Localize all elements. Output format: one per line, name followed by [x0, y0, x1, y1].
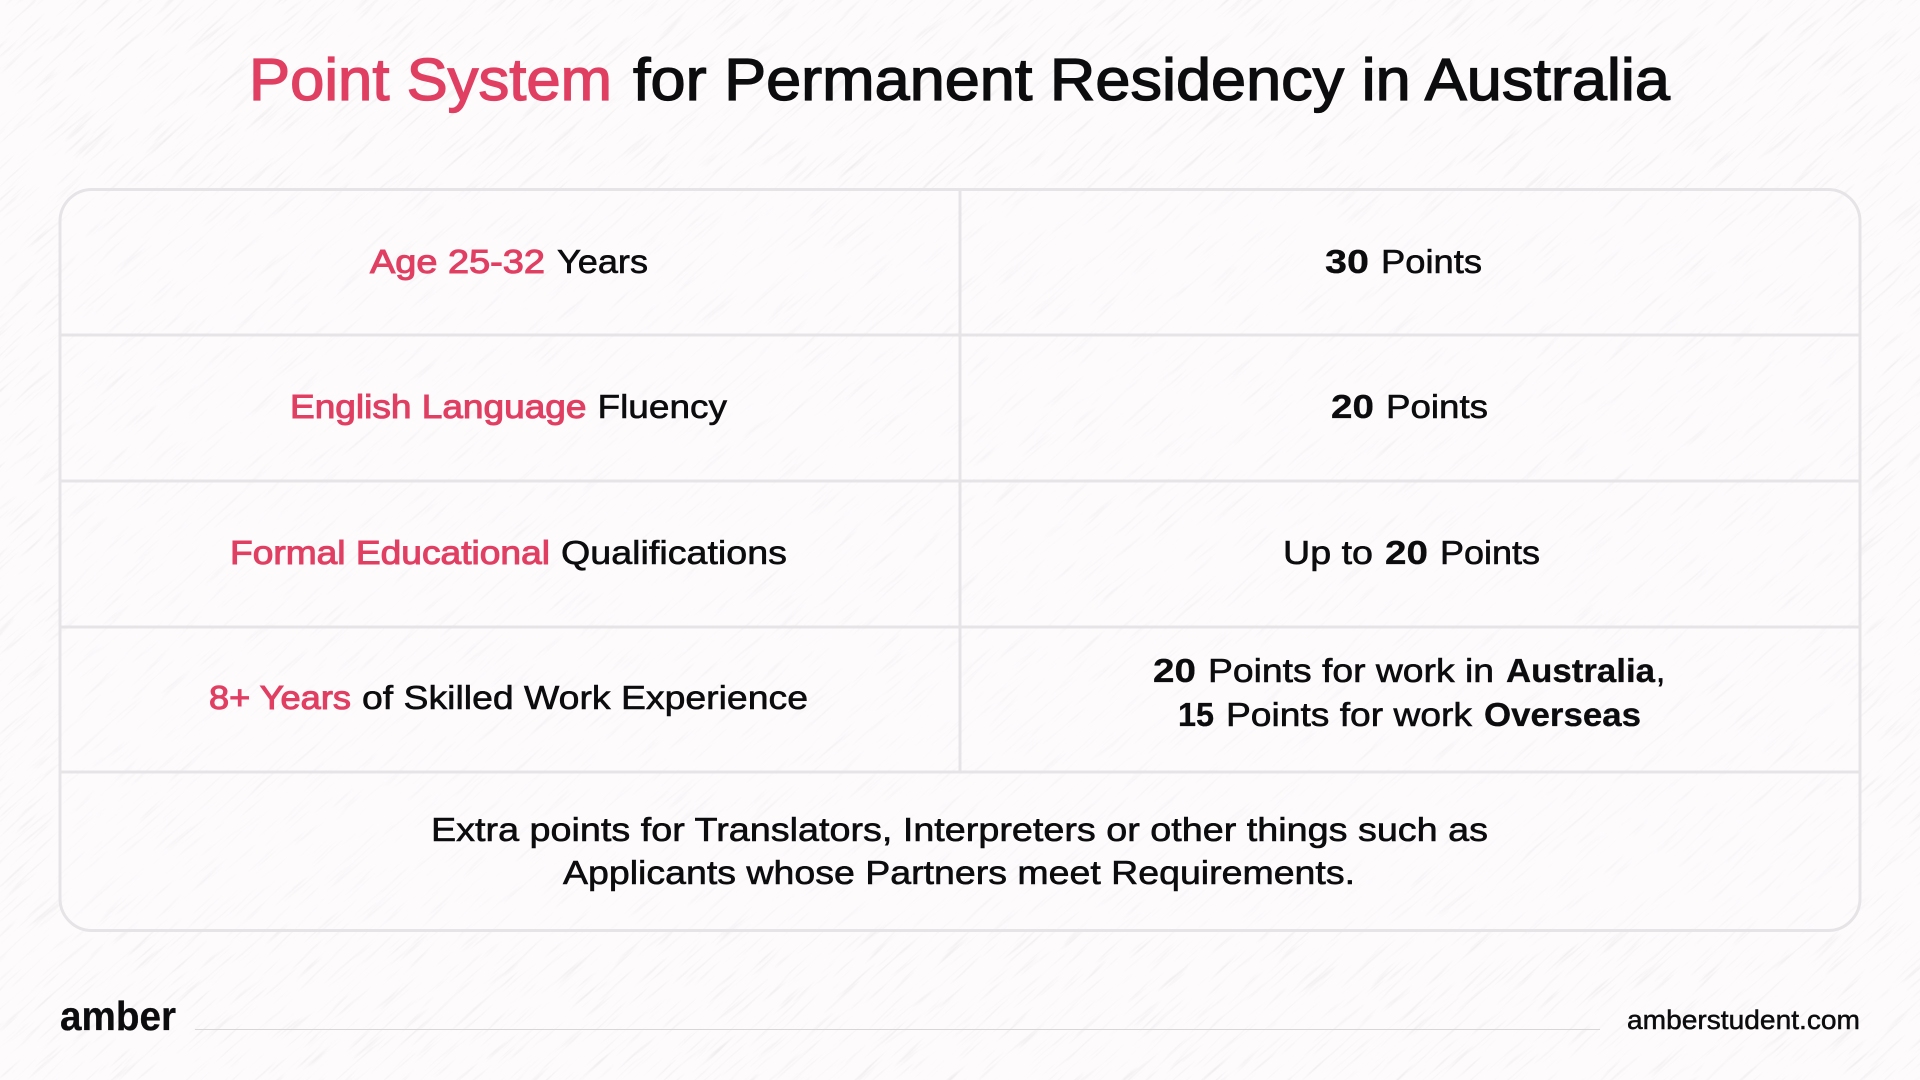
footer rule [195, 1029, 1600, 1030]
row: english language: Fluency [598, 388, 728, 425]
row: age: Points [1381, 243, 1482, 280]
row: english language: Points [1386, 388, 1488, 425]
row: education: Points [1440, 534, 1540, 571]
note: extra points: Applicants whose Partners meet Requirements. [563, 854, 1355, 891]
row: english language: English Language [290, 388, 586, 425]
row: age: Age 25-32 [370, 243, 545, 280]
title: Point System [249, 47, 612, 113]
row: education: Formal Educational [230, 534, 550, 571]
logo: amber: amber [60, 993, 176, 1039]
row: work experience: 20 [1153, 652, 1196, 689]
row: education: Qualifications [561, 534, 787, 571]
row: work experience: Points for work [1226, 696, 1473, 733]
row: age [370, 243, 1482, 280]
row: english language [290, 388, 1488, 425]
row: education [230, 534, 1540, 571]
row: work experience: Overseas [1484, 696, 1641, 733]
footer [60, 993, 1860, 1039]
row: work experience [209, 652, 1665, 733]
website url: amberstudent.com [1627, 1005, 1860, 1035]
row: work experience: Points for work in [1208, 652, 1494, 689]
row: english language: 20 [1331, 388, 1374, 425]
title: for Permanent Residency in Australia [633, 47, 1670, 113]
panel: points table [60, 190, 1860, 930]
note: extra points [431, 811, 1488, 891]
row: work experience: Australia [1506, 652, 1656, 689]
row: work experience: 15 [1178, 696, 1214, 733]
row: age: 30 [1325, 243, 1369, 280]
row: education: Up to [1283, 534, 1373, 571]
row: work experience: , [1656, 652, 1665, 689]
row: age: Years [557, 243, 648, 280]
row: work experience: of Skilled Work Experience [362, 679, 808, 716]
note: extra points: Extra points for Translators, Interpreters or other things such as [431, 811, 1488, 848]
row: education: 20 [1385, 534, 1428, 571]
title [249, 47, 1670, 113]
table grid lines [60, 190, 1860, 772]
table frame [60, 190, 1860, 930]
row: work experience: 8+ Years [209, 679, 351, 716]
